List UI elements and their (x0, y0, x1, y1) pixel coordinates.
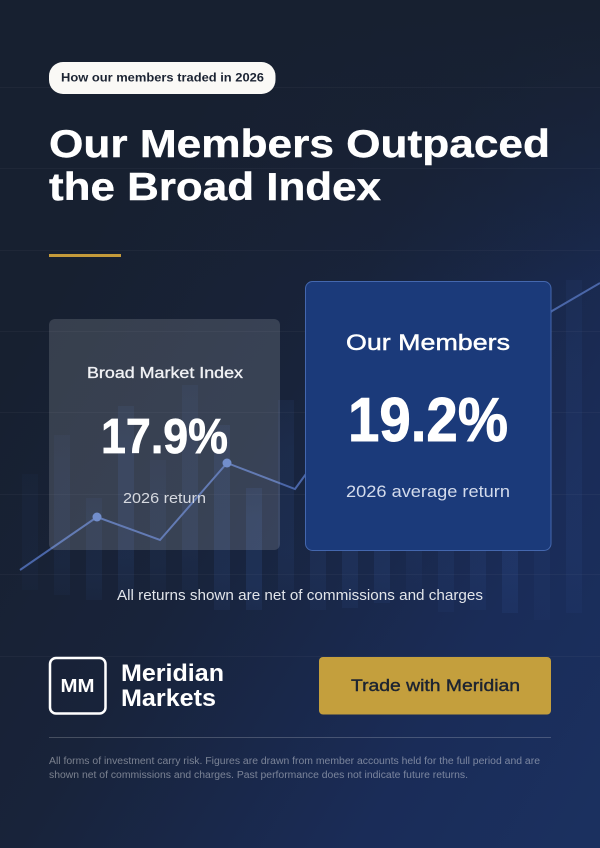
return caption: 2026 average return (346, 483, 510, 501)
title: the Broad Index (49, 166, 381, 209)
return caption: 2026 return (123, 490, 206, 507)
brand name (121, 660, 224, 712)
background bar chart (22, 280, 582, 620)
net returns note: All returns shown are net of commissions and charges (117, 588, 483, 604)
pill badge (49, 62, 276, 94)
disclaimer (49, 756, 541, 781)
title (49, 123, 550, 209)
accent rule (49, 254, 121, 257)
return value: 17.9% (101, 410, 228, 464)
call to action button (319, 657, 551, 714)
call to action button: Trade with Meridian (351, 676, 520, 695)
panel: broad market index (49, 319, 280, 550)
disclaimer: shown net of commissions and charges. Past performance does not indicate future returns. (49, 770, 468, 781)
disclaimer: All forms of investment carry risk. Figures are drawn from member accounts held for the full period and are (49, 756, 541, 767)
brand name: Meridian (121, 660, 224, 687)
icon: logo mark (50, 658, 106, 714)
icon: logo mark: MM (60, 676, 94, 696)
background line chart (20, 283, 600, 570)
panel label: Broad Market Index (87, 365, 243, 382)
brand name: Markets (121, 685, 216, 712)
pill badge: How our members traded in 2026 (61, 70, 264, 84)
logo (50, 658, 224, 714)
title: Our Members Outpaced (49, 123, 550, 166)
panel label: Our Members (346, 330, 510, 355)
panel: our members (306, 282, 551, 550)
return value: 19.2% (348, 386, 508, 455)
